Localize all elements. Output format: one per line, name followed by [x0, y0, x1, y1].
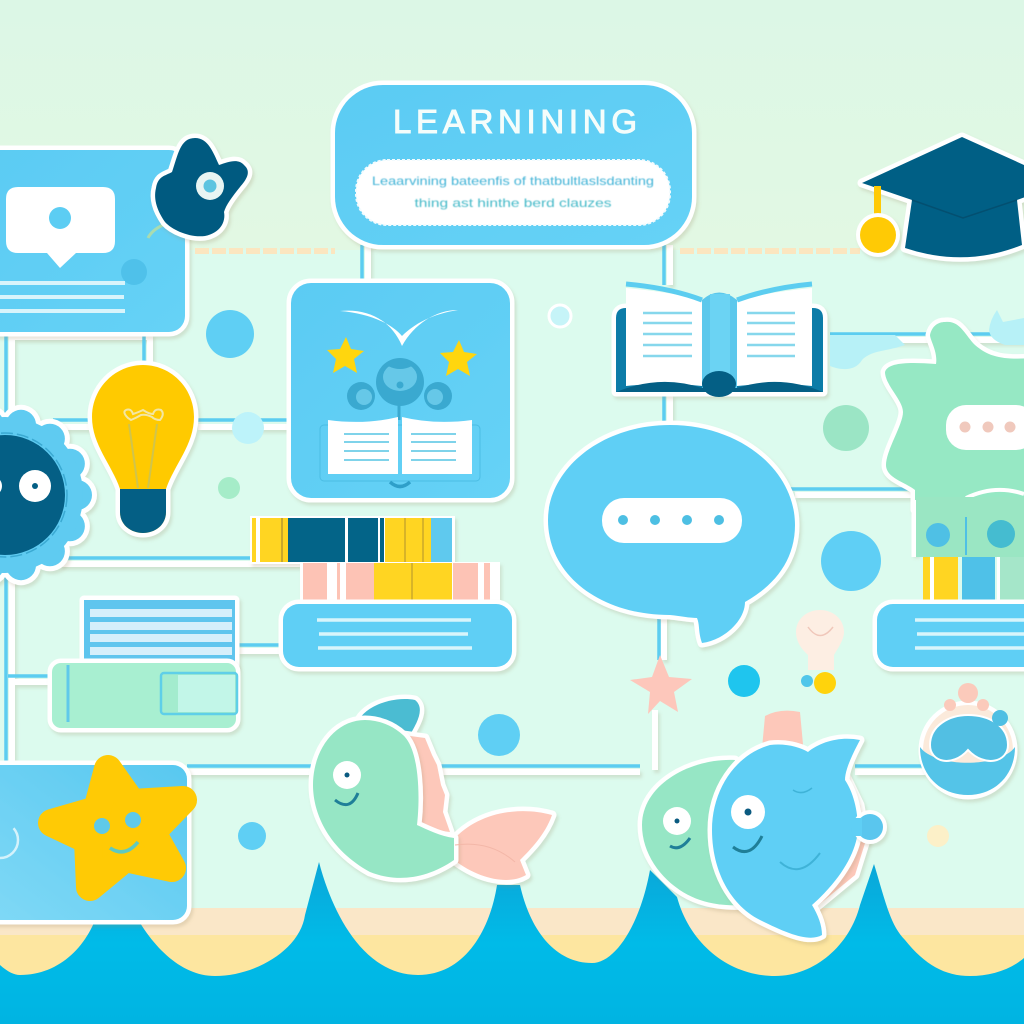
- icon: white swoosh: [340, 310, 458, 346]
- icon: light bulb: [92, 365, 194, 533]
- icon: blue fish pair: [642, 711, 887, 938]
- icon: chat bubble: [6, 187, 115, 268]
- label card: [877, 604, 1024, 667]
- panel: left stacked books: [52, 600, 237, 728]
- panel: bottom-left star card: [0, 765, 187, 920]
- icon: light blue splashes: [830, 310, 1024, 369]
- panel: left message card: [0, 150, 185, 332]
- panel: right book stack: [877, 497, 1024, 667]
- icon: stars: [327, 337, 477, 376]
- icon: gear face: [0, 415, 85, 575]
- icon: mascot head: [347, 358, 452, 420]
- panel: green blob with chat: [885, 322, 1024, 510]
- panel: center book card: [291, 283, 510, 498]
- title panel: [335, 85, 692, 245]
- icon: small whale badge: [920, 683, 1015, 795]
- description pill: [356, 160, 670, 225]
- icon: pink star: [630, 655, 692, 714]
- label card: [283, 604, 512, 667]
- description text: [372, 174, 654, 210]
- panel: center book stack: [250, 516, 512, 667]
- sea waves: [0, 862, 1024, 1024]
- icon: open book: [320, 417, 480, 486]
- connector lines: [0, 245, 1024, 772]
- decorative dots: [206, 305, 949, 850]
- icon: large open book: [616, 284, 823, 397]
- icon: dark blob with eye: [148, 138, 248, 238]
- description text: thing ast hinthe berd clauzes: [414, 196, 612, 210]
- icon: large speech bubble: [548, 425, 795, 643]
- icon: small smiling bulb: [796, 610, 844, 694]
- icon: green fish: [313, 699, 552, 880]
- icon: yellow starfish: [52, 769, 183, 887]
- heading: LEARNINING: [393, 103, 637, 140]
- chat pill: [946, 405, 1024, 450]
- description text: Leaarvining bateenfis of thatbultlaslsdanting: [372, 174, 654, 188]
- icon: graduation cap: [856, 137, 1024, 257]
